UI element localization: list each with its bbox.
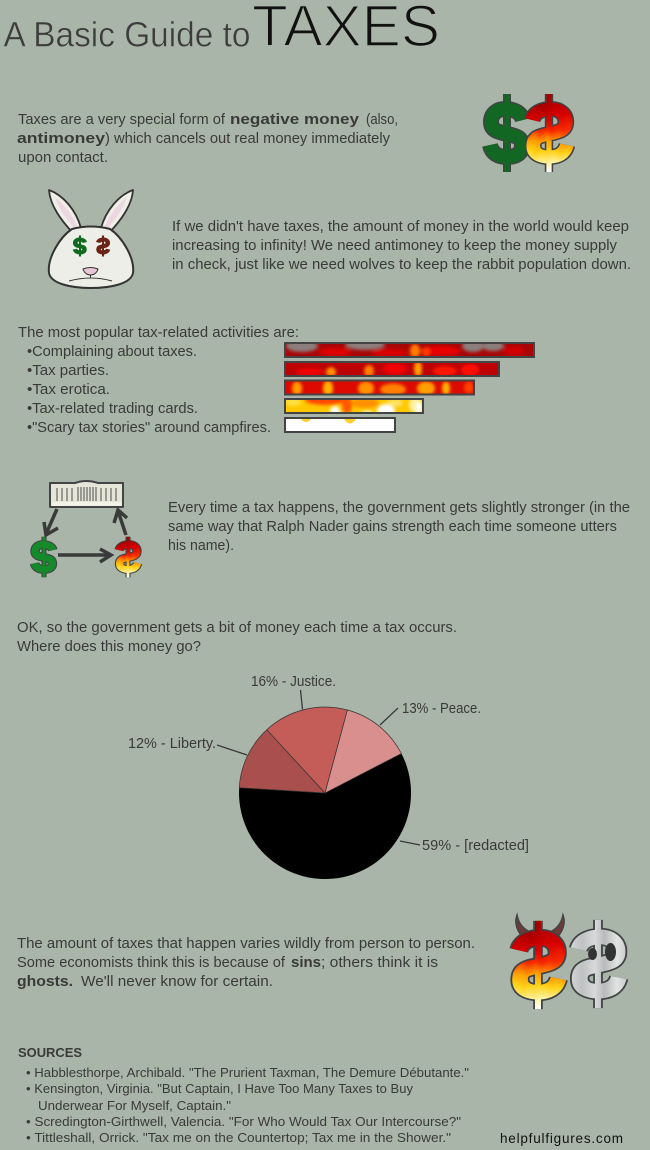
- icon: small green dollar: [34, 537, 53, 577]
- rabbit left ear: [49, 190, 81, 232]
- arrow: government to dollar: [44, 509, 58, 535]
- bar: trading cards: [285, 395, 423, 420]
- sources list: Underwear For Myself, Captain.": [38, 1098, 231, 1113]
- text block: where does the money go: OK, so the government gets a bit of money each time a tax occurs.: [17, 619, 457, 636]
- slice: 12% liberty: [239, 730, 325, 793]
- title: A Basic Guide to: A Basic Guide to: [4, 16, 250, 54]
- arrow: dollar to antidollar: [58, 549, 111, 562]
- text block: government gets stronger: his name).: [168, 537, 234, 554]
- text block: popular activities list: [18, 324, 299, 436]
- rabbit head: [49, 226, 133, 288]
- devil horns: [516, 915, 564, 943]
- text block: rabbits and wolves: increasing to infinity! We need antimoney to keep the money supply: [172, 237, 617, 254]
- pie label: redacted: 59% - [redacted]: [422, 838, 529, 854]
- credit: helpfulfigures.com: helpfulfigures.com: [500, 1131, 623, 1146]
- text block: sins and ghosts: sins: [291, 954, 321, 971]
- pie label: liberty: 12% - Liberty.: [128, 736, 216, 752]
- text block: sins and ghosts: We'll never know for certain.: [81, 973, 273, 990]
- sources list: • Habblesthorpe, Archibald. "The Prurient Taxman, The Demure Débutante.": [26, 1065, 469, 1080]
- leader lines: [217, 690, 420, 845]
- icon: green dollar: [490, 94, 523, 172]
- ghost antidollar body: [578, 920, 619, 1008]
- text block: sins and ghosts: ghosts.: [17, 973, 73, 990]
- text block: antimoney intro: ) which cancels out real money immediately: [105, 130, 390, 147]
- text block: government gets stronger: [168, 499, 630, 554]
- text block: where does the money go: [17, 619, 457, 655]
- icon: devil antidollar: [510, 912, 568, 1010]
- icon: flaming antidollar: [524, 94, 575, 172]
- slice: 59% redacted: [239, 754, 411, 879]
- rabbit mouth: [69, 275, 112, 281]
- text block: popular activities list: •"Scary tax stories" around campfires.: [27, 419, 271, 436]
- devil antidollar body: [510, 920, 568, 1010]
- text block: popular activities list: The most popular tax-related activities are:: [18, 324, 299, 341]
- text block: antimoney intro: upon contact.: [18, 149, 108, 166]
- text block: sins and ghosts: ; others think it is: [321, 954, 438, 971]
- bar chart: flame bars: [285, 340, 534, 432]
- sources list: • Tittleshall, Orrick. "Tax me on the Countertop; Tax me in the Shower.": [26, 1130, 451, 1145]
- text block: antimoney intro: [17, 111, 398, 166]
- bar: tax parties: [285, 361, 499, 377]
- arrow: antidollar to government: [114, 510, 127, 535]
- pie chart: where tax money goes: [128, 674, 529, 879]
- icon: rabbit with dollar eyes: [49, 190, 133, 288]
- text block: antimoney intro: antimoney: [17, 130, 106, 147]
- text block: popular activities list: •Tax erotica.: [27, 381, 110, 398]
- text block: sins and ghosts: [17, 935, 475, 990]
- ghost left eye: [588, 948, 597, 960]
- text block: sins and ghosts: Some economists think this is because of: [17, 954, 286, 971]
- title: [4, 0, 440, 59]
- rabbit nose: [83, 268, 98, 275]
- text block: antimoney intro: negative money: [230, 111, 360, 128]
- sources list: [26, 1065, 469, 1145]
- sources heading: SOURCES: [18, 1045, 82, 1060]
- text block: government gets stronger: Every time a tax happens, the government gets slightly stronger (in the: [168, 499, 630, 516]
- text block: antimoney intro: Taxes are a very special form of: [18, 111, 226, 128]
- rabbit right ear: [101, 190, 133, 232]
- text block: popular activities list: •Complaining about taxes.: [27, 343, 197, 360]
- pie label: justice: 16% - Justice.: [251, 674, 336, 690]
- diagram: tax cycle: [30, 480, 142, 578]
- slice: 16% justice: [267, 707, 347, 793]
- bar: tax erotica: [285, 380, 474, 396]
- rabbit dollar eye: [75, 235, 85, 257]
- bar: complaining about taxes: [285, 340, 534, 358]
- icon: small flaming antidollar: [114, 536, 142, 578]
- icon: ghost antidollar: [578, 920, 619, 1008]
- slice: 13% peace: [325, 710, 401, 793]
- text block: rabbits and wolves: in check, just like we need wolves to keep the rabbit population down.: [172, 256, 631, 273]
- text block: antimoney intro: (also,: [366, 111, 398, 128]
- text block: popular activities list: •Tax parties.: [27, 362, 109, 379]
- text block: rabbits and wolves: [172, 218, 631, 273]
- text block: government gets stronger: same way that Ralph Nader gains strength each time someone utters: [168, 518, 617, 535]
- rabbit antidollar eye: [98, 235, 108, 257]
- text block: sins and ghosts: The amount of taxes that happen varies wildly from person to person.: [17, 935, 475, 952]
- text block: rabbits and wolves: If we didn't have taxes, the amount of money in the world would keep: [172, 218, 629, 235]
- icon: government building: [50, 481, 123, 507]
- icon: dollar and flaming antidollar: [482, 94, 575, 172]
- bar: scary tax stories: [285, 418, 395, 432]
- ghost right eye: [605, 943, 616, 961]
- sources list: • Kensington, Virginia. "But Captain, I Have Too Many Taxes to Buy: [26, 1081, 413, 1096]
- pie label: peace: 13% - Peace.: [402, 701, 481, 717]
- text block: where does the money go: Where does this money go?: [17, 638, 201, 655]
- text block: popular activities list: •Tax-related trading cards.: [27, 400, 198, 417]
- sources list: • Scredington-Girthwell, Valencia. "For Who Would Tax Our Intercourse?": [26, 1114, 461, 1129]
